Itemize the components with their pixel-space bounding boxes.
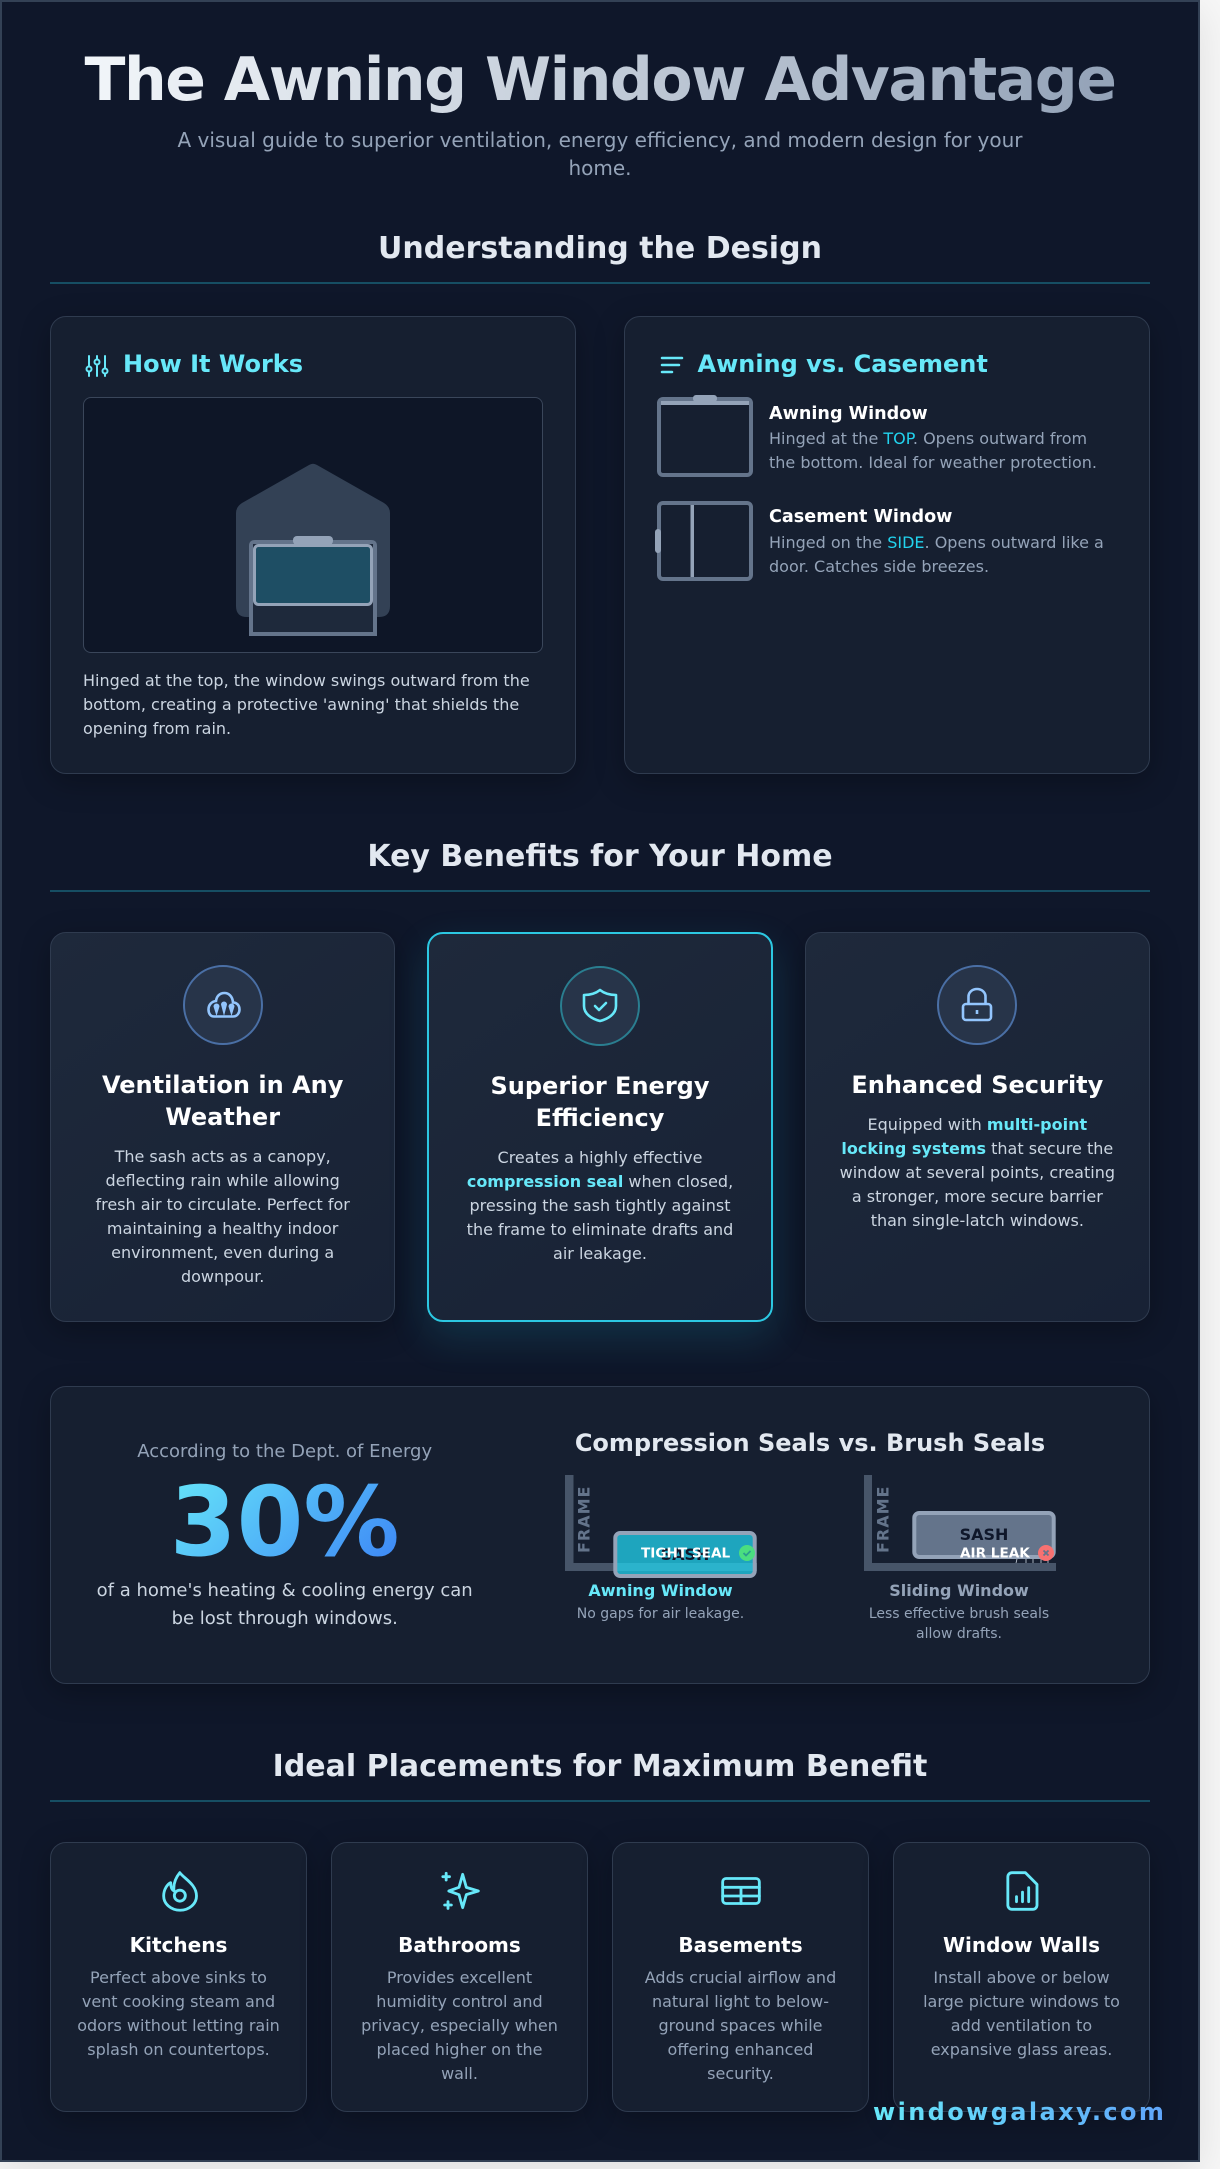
card text: compression seal when closed, [467, 1172, 733, 1191]
stat text [97, 1580, 473, 1629]
card text [840, 1114, 1115, 1230]
panel: window walls [893, 1842, 1150, 2112]
card heading [102, 1070, 343, 1130]
casement text [769, 507, 1104, 576]
icon: casement window [655, 501, 753, 581]
note: sliding window: allow drafts. [916, 1626, 1002, 1642]
card heading: Window Walls [943, 1933, 1100, 1957]
description [83, 671, 530, 738]
panel: kitchens [50, 1842, 307, 2112]
section heading: key benefits: Key Benefits for Your Home [367, 839, 833, 874]
card text: a stronger, more secure barrier [852, 1186, 1103, 1206]
icon: sparkles [441, 1872, 480, 1910]
card heading: Basements [678, 1933, 803, 1957]
diagram: awning window on house [83, 397, 543, 653]
diagram: brush seal: SASH [960, 1525, 1008, 1544]
card text: downpour. [181, 1266, 264, 1286]
icon: file with bars [1006, 1871, 1038, 1911]
card text: air leakage. [553, 1244, 647, 1263]
diagram: compression seal [565, 1475, 757, 1578]
awning text [769, 404, 1097, 472]
card text [77, 1968, 280, 2059]
card text: privacy, especially when [361, 2016, 558, 2035]
label: awning window: Awning Window [588, 1580, 733, 1600]
card text: locking systems that secure the [841, 1138, 1113, 1158]
card text: offering enhanced [668, 2040, 813, 2059]
card text: humidity control and [376, 1992, 543, 2011]
card text: placed higher on the [377, 2040, 542, 2059]
icon: sliders [86, 355, 108, 377]
card text: security. [707, 2064, 774, 2083]
card text: Adds crucial airflow and [645, 1968, 836, 1987]
section heading: ideal placements: Ideal Placements for Maximum Benefit [273, 1749, 927, 1784]
card heading: Enhanced Security [851, 1070, 1103, 1098]
awning text: Hinged at the TOP. Opens outward from [769, 429, 1087, 448]
card text: environment, even during a [111, 1242, 334, 1262]
diagram: compression seal: SASH [661, 1545, 709, 1564]
stat text: be lost through windows. [172, 1608, 398, 1629]
card heading: Weather [165, 1102, 280, 1130]
card text [645, 1968, 836, 2083]
panel heading: Awning vs. Casement [698, 350, 988, 378]
casement text: Hinged on the SIDE. Opens outward like a [769, 533, 1104, 552]
card text: splash on countertops. [87, 2040, 270, 2059]
card text: than single-latch windows. [871, 1210, 1084, 1230]
card heading: Efficiency [536, 1104, 664, 1132]
panel: awning vs casement [624, 316, 1150, 774]
diagram: compression seal: TIGHT SEAL [641, 1546, 730, 1562]
subtitle [177, 128, 1023, 180]
panel: ventilation [50, 932, 395, 1322]
card heading: Bathrooms [398, 1933, 521, 1957]
note: awning window: No gaps for air leakage. [577, 1606, 744, 1622]
card text: vent cooking steam and [82, 1992, 275, 2011]
icon: table [721, 1877, 761, 1905]
stat text: of a home's heating & cooling energy can [97, 1580, 473, 1601]
card heading [490, 1072, 710, 1132]
chart heading: Compression Seals vs. Brush Seals [575, 1429, 1045, 1457]
card text: Install above or below [933, 1968, 1110, 1987]
card text: fresh air to circulate. Perfect for [95, 1194, 350, 1214]
card text [467, 1148, 733, 1263]
panel: energy efficiency [427, 932, 773, 1322]
panel: how it works [50, 316, 576, 774]
awning text: the bottom. Ideal for weather protection. [769, 453, 1097, 472]
description: bottom, creating a protective 'awning' that shields the [83, 695, 519, 714]
panel heading: How It Works [123, 350, 303, 378]
card text: wall. [441, 2064, 478, 2083]
card text: maintaining a healthy indoor [107, 1218, 338, 1238]
stat number: 30% [170, 1466, 400, 1578]
card heading: Kitchens [130, 1933, 227, 1957]
title: The Awning Window Advantage [85, 45, 1115, 115]
card text [95, 1146, 350, 1286]
diagram: brush seal [864, 1475, 1056, 1571]
stat source: According to the Dept. of Energy [137, 1441, 432, 1462]
panel: security [805, 932, 1150, 1322]
icon: awning window [657, 395, 753, 477]
brand footer: windowgalaxy.com [873, 2098, 1166, 2126]
section heading: understanding the design: Understanding the Design [378, 231, 822, 266]
icon: shield check [560, 966, 640, 1046]
diagram: compression seal: FRAME [574, 1486, 594, 1553]
card heading: Superior Energy [490, 1072, 709, 1100]
card text: pressing the sash tightly against [469, 1196, 730, 1215]
card text: expansive glass areas. [931, 2040, 1112, 2059]
note: sliding window [869, 1606, 1049, 1642]
card text: the frame to eliminate drafts and [467, 1220, 733, 1239]
card text: Equipped with multi-point [868, 1114, 1087, 1134]
diagram: brush seal: FRAME [874, 1486, 892, 1553]
panel: basements [612, 1842, 869, 2112]
description: opening from rain. [83, 719, 231, 738]
card text: natural light to below- [652, 1992, 829, 2011]
icon: lock [937, 965, 1017, 1045]
card text: add ventilation to [951, 2016, 1092, 2035]
icon: cloud with rain [183, 965, 263, 1045]
card text: large picture windows to [923, 1992, 1120, 2011]
card text [923, 1968, 1120, 2059]
casement text: Casement Window [769, 507, 952, 527]
card text [361, 1968, 558, 2083]
subtitle: A visual guide to superior ventilation, energy efficiency, and modern design for your [177, 128, 1023, 152]
card text: odors without letting rain [77, 2016, 280, 2035]
card text: ground spaces while [658, 2016, 822, 2035]
card text: window at several points, creating [840, 1162, 1115, 1182]
awning text: Awning Window [769, 404, 928, 424]
icon: lines [660, 356, 684, 374]
casement text: door. Catches side breezes. [769, 557, 989, 576]
card heading: Ventilation in Any [102, 1070, 343, 1098]
description: Hinged at the top, the window swings outward from the [83, 671, 530, 690]
card text: Perfect above sinks to [90, 1968, 267, 1987]
panel: bathrooms [331, 1842, 588, 2112]
icon: flame [162, 1871, 198, 1912]
card text: Provides excellent [387, 1968, 532, 1987]
label: sliding window: Sliding Window [889, 1580, 1029, 1600]
diagram: brush seal: AIR LEAK [960, 1546, 1030, 1562]
subtitle: home. [568, 156, 632, 180]
panel: statistic and seals [50, 1386, 1150, 1684]
card text: The sash acts as a canopy, [115, 1146, 331, 1166]
card text: deflecting rain while allowing [106, 1170, 340, 1190]
note: sliding window: Less effective brush seals [869, 1606, 1049, 1622]
card text: Creates a highly effective [498, 1148, 702, 1167]
